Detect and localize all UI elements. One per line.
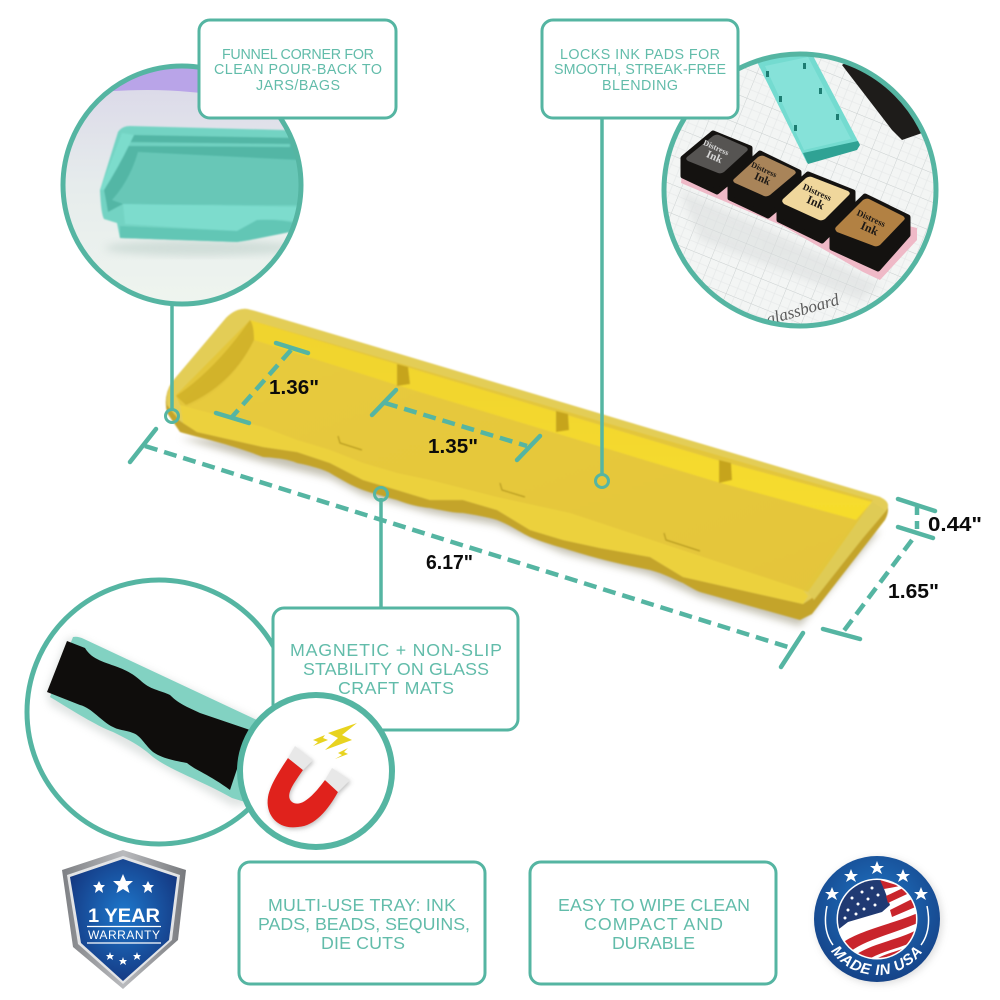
label: 0.44: 0.44"	[928, 514, 982, 536]
callout: multi-use tray: PADS, BEADS, SEQUINS,	[258, 914, 470, 934]
label: 1.35: 1.35"	[428, 436, 478, 458]
ink pad 3: Ink	[805, 192, 827, 213]
icon: warranty shield: WARRANTY	[88, 928, 160, 942]
connector: ink pad lock	[596, 118, 608, 488]
panel: ink pads photo	[660, 45, 945, 330]
dimension: 0.44 inch	[898, 499, 935, 538]
dimension: 6.17 inch length	[130, 429, 803, 667]
badge: made in USA	[814, 856, 944, 986]
ink pad 3	[779, 174, 853, 241]
ink pad 1: Distress	[702, 138, 730, 157]
floor notches	[338, 436, 700, 551]
callout: funnel corner: JARS/BAGS	[256, 78, 340, 94]
callout: easy to wipe clean: DURABLE	[612, 933, 695, 953]
callout: multi-use tray	[239, 862, 485, 984]
main yellow tray	[166, 309, 888, 626]
callout: funnel corner	[199, 20, 396, 118]
callout: locks ink pads	[542, 20, 738, 118]
ink pad 2: Ink	[752, 170, 773, 188]
ribs on back wall	[397, 364, 732, 483]
label: 6.17: 6.17"	[426, 552, 473, 574]
ink pad 1	[683, 133, 750, 192]
icon: warranty shield: 1 YEAR	[88, 906, 160, 927]
icon: warranty shield	[62, 850, 186, 989]
callout: magnetic non-slip: STABILITY ON GLASS	[303, 659, 489, 679]
connector: magnetic callout	[379, 498, 383, 608]
panel: magnetic strip photo	[25, 578, 295, 848]
callout: magnetic non-slip: CRAFT MATS	[338, 678, 454, 698]
callout: magnetic non-slip	[273, 608, 518, 730]
panel: funnel corner photo	[60, 60, 310, 310]
panel: ink pads photo: glassboard	[764, 290, 842, 329]
icon: magnet circle	[240, 695, 392, 847]
callout: multi-use tray: DIE CUTS	[321, 933, 405, 953]
connector: funnel corner	[166, 306, 178, 422]
callout: magnetic non-slip: MAGNETIC + NON-SLIP	[290, 640, 502, 660]
ink pad 4: Ink	[859, 218, 881, 239]
label: 1.36: 1.36"	[269, 377, 319, 399]
dimension: 1.36 inch	[216, 343, 308, 423]
callout: locks ink pads: BLENDING	[602, 78, 678, 94]
dimension: 1.65 inch	[823, 540, 912, 639]
callout: funnel corner: FUNNEL CORNER FOR	[222, 47, 374, 63]
ink pad 2: Distress	[750, 160, 778, 179]
ink pad 4: Distress	[855, 208, 888, 229]
callout: multi-use tray: MULTI-USE TRAY: INK	[268, 895, 456, 915]
callout: easy to wipe clean	[530, 862, 776, 984]
callout: locks ink pads: SMOOTH, STREAK-FREE	[554, 62, 726, 78]
callout: easy to wipe clean: COMPACT AND	[584, 914, 723, 934]
badge: made in USA: MADE IN USA	[830, 946, 922, 976]
dimension: 1.35 inch	[372, 390, 540, 460]
callout: funnel corner: CLEAN POUR-BACK TO	[214, 62, 382, 78]
callout: locks ink pads: LOCKS INK PADS FOR	[560, 47, 720, 63]
connector ring: magnetic	[374, 488, 388, 500]
ink pad 1: Ink	[704, 148, 725, 166]
label: 1.65: 1.65"	[888, 581, 939, 603]
callout: easy to wipe clean: EASY TO WIPE CLEAN	[558, 895, 750, 915]
ink pad 2	[730, 153, 799, 216]
ink pad 3: Distress	[801, 182, 834, 203]
ink pad 4	[832, 196, 908, 269]
